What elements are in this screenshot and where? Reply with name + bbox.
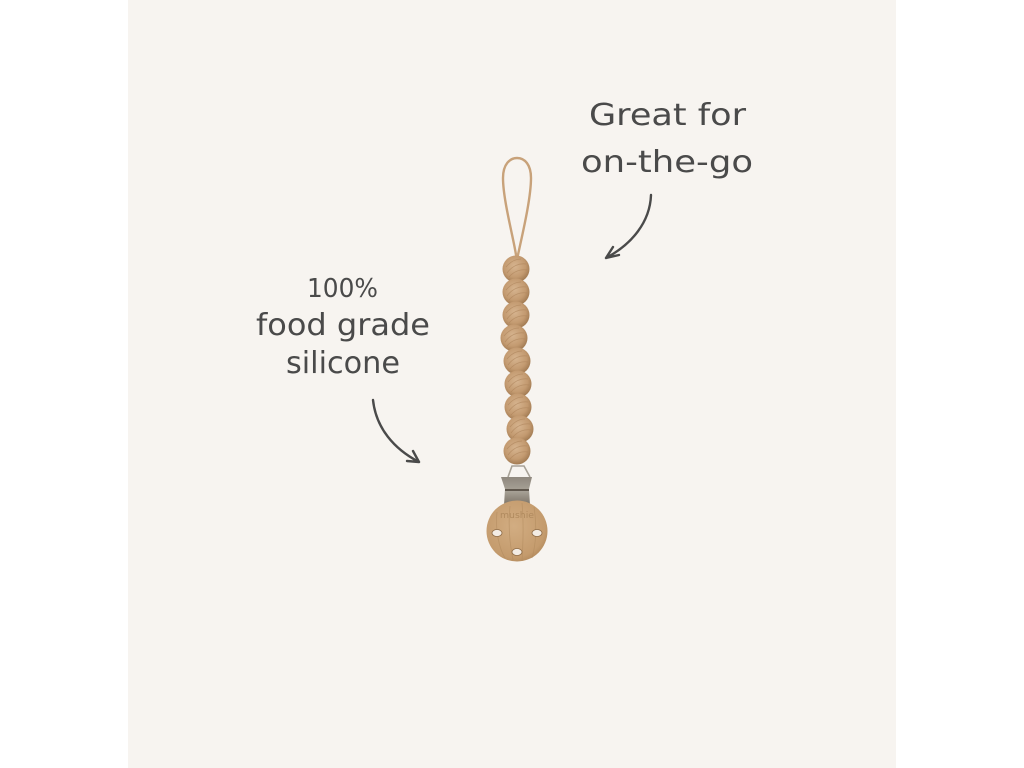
callout text: on-the-go	[581, 145, 753, 180]
cord loop	[503, 158, 531, 255]
metal clip	[501, 466, 532, 505]
callout text: 100%	[307, 274, 378, 304]
callout: food grade silicone	[256, 274, 430, 462]
silicone beads	[500, 256, 534, 464]
callout text: Great for	[589, 98, 747, 133]
product: pacifier clip	[486, 158, 548, 562]
wooden clip disc	[486, 500, 548, 562]
callout: great for on-the-go	[581, 98, 753, 258]
callout text	[581, 98, 753, 180]
wooden clip disc: mushie	[500, 511, 534, 521]
arrow: pointing to beads	[373, 400, 419, 462]
callout text: food grade	[256, 308, 430, 343]
background panel	[128, 0, 896, 768]
callout text: silicone	[286, 346, 400, 381]
callout text	[256, 274, 430, 381]
arrow: pointing to cord	[606, 195, 651, 258]
